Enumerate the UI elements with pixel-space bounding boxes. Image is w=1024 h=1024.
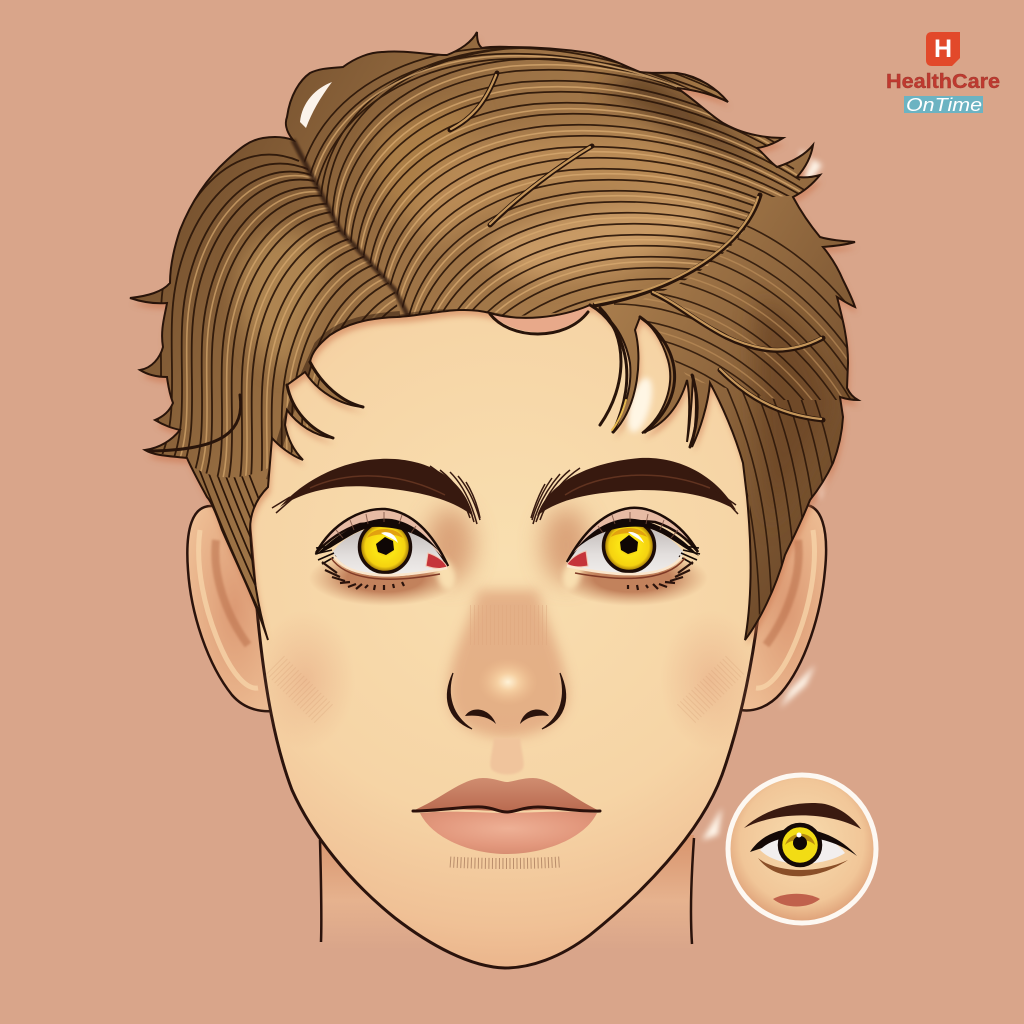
hair mass bbox=[130, 32, 858, 640]
logo tagline: OnTime bbox=[906, 95, 982, 115]
lower lashes bbox=[628, 562, 693, 590]
left eyebrow bbox=[272, 459, 480, 524]
left sideburn strands bbox=[198, 470, 260, 614]
right lower strands bbox=[712, 385, 832, 616]
right wing bbox=[542, 673, 566, 729]
lips bbox=[412, 778, 600, 864]
white gap in top curl bbox=[300, 82, 332, 128]
upper lash line bbox=[316, 519, 440, 555]
orange top of iris bbox=[367, 529, 403, 538]
inset eye white bbox=[760, 833, 845, 864]
top sweep light strands bbox=[313, 54, 801, 314]
orange top of iris bbox=[611, 528, 647, 537]
left ear bbox=[187, 506, 274, 711]
inner corner caruncle bbox=[567, 551, 588, 567]
pupil bbox=[376, 537, 394, 555]
nostrils bbox=[465, 709, 549, 724]
hair outline bbox=[130, 32, 858, 640]
hair highlight patches bbox=[238, 70, 830, 530]
outer lashes bbox=[315, 546, 336, 564]
lower lid line bbox=[334, 556, 447, 575]
nose bbox=[447, 590, 568, 774]
mouth line bbox=[413, 807, 600, 812]
skin under hair curl bbox=[488, 305, 592, 332]
inset iris bbox=[780, 825, 820, 865]
illustration canvas bbox=[130, 32, 1000, 970]
logo icon: H bbox=[934, 35, 952, 63]
outer lashes bbox=[679, 546, 700, 564]
lower lid line bbox=[567, 556, 682, 574]
inner corner light bbox=[562, 550, 586, 590]
cheek hatching bbox=[275, 665, 735, 715]
bright spot beside the forelock bbox=[623, 375, 657, 435]
gold glint on forelock bbox=[612, 400, 626, 430]
inset iris shading bbox=[785, 834, 815, 845]
shading beside the nose bridge bbox=[426, 507, 590, 583]
logo name: HealthCare bbox=[886, 71, 1000, 93]
hair bbox=[130, 32, 896, 650]
inset disc bbox=[728, 775, 876, 923]
right ear bbox=[741, 505, 826, 710]
catchlight bbox=[381, 532, 398, 543]
iris bbox=[360, 522, 410, 572]
left wing bbox=[447, 673, 472, 729]
hair shadow on the forehead bbox=[132, 38, 860, 646]
sclera bbox=[332, 526, 447, 577]
upper lid lines bbox=[336, 512, 416, 538]
right side light strands bbox=[642, 256, 847, 400]
inset pupil bbox=[793, 836, 807, 850]
key locks bbox=[150, 73, 823, 451]
left eye bbox=[309, 509, 461, 606]
nose tip highlight bbox=[478, 658, 538, 706]
sclera bbox=[567, 524, 684, 575]
forelock tips bbox=[150, 305, 697, 451]
cheek shading right bbox=[660, 610, 760, 750]
upper lash line bbox=[575, 519, 699, 556]
inset lower lashes bbox=[758, 858, 848, 876]
left lobe light strands bbox=[180, 174, 396, 478]
eyelid bbox=[567, 508, 698, 562]
nose bridge hatching bbox=[470, 605, 548, 645]
face bbox=[230, 300, 790, 968]
socket shadow bbox=[309, 550, 461, 606]
left lobe dark strands bbox=[157, 154, 398, 478]
upper lip bbox=[412, 778, 600, 811]
inset eyebrow bbox=[744, 803, 861, 829]
neck bbox=[320, 835, 694, 950]
inset upper lid bbox=[750, 828, 857, 856]
inner corner light bbox=[432, 550, 456, 590]
hair strand texture bbox=[157, 48, 851, 616]
catchlight bbox=[628, 532, 644, 543]
inset catchlight bbox=[796, 832, 802, 838]
right eyebrow bbox=[531, 458, 738, 524]
eyelid bbox=[316, 509, 448, 566]
nose shadow bbox=[448, 590, 568, 738]
philtrum bbox=[490, 738, 524, 774]
pupil bbox=[620, 535, 638, 554]
top sweep dark strands bbox=[304, 48, 804, 316]
hairline darkening bbox=[270, 315, 400, 480]
part line shadow bbox=[293, 140, 410, 320]
upper lid lines bbox=[598, 512, 678, 538]
logo bbox=[886, 32, 1000, 115]
iris bbox=[604, 520, 654, 572]
cheek shading left bbox=[255, 610, 355, 750]
right eye bbox=[556, 508, 708, 606]
right side dark strands bbox=[614, 226, 851, 400]
inset lips bbox=[773, 894, 820, 906]
inner corner caruncle bbox=[426, 553, 447, 569]
white halo patches around the head bbox=[702, 150, 828, 840]
lower lashes bbox=[322, 562, 404, 590]
inset circle: eye close-up bbox=[728, 775, 876, 923]
socket shadow bbox=[556, 550, 708, 606]
lower lip bbox=[420, 812, 597, 854]
hatch below lip bbox=[450, 862, 560, 864]
